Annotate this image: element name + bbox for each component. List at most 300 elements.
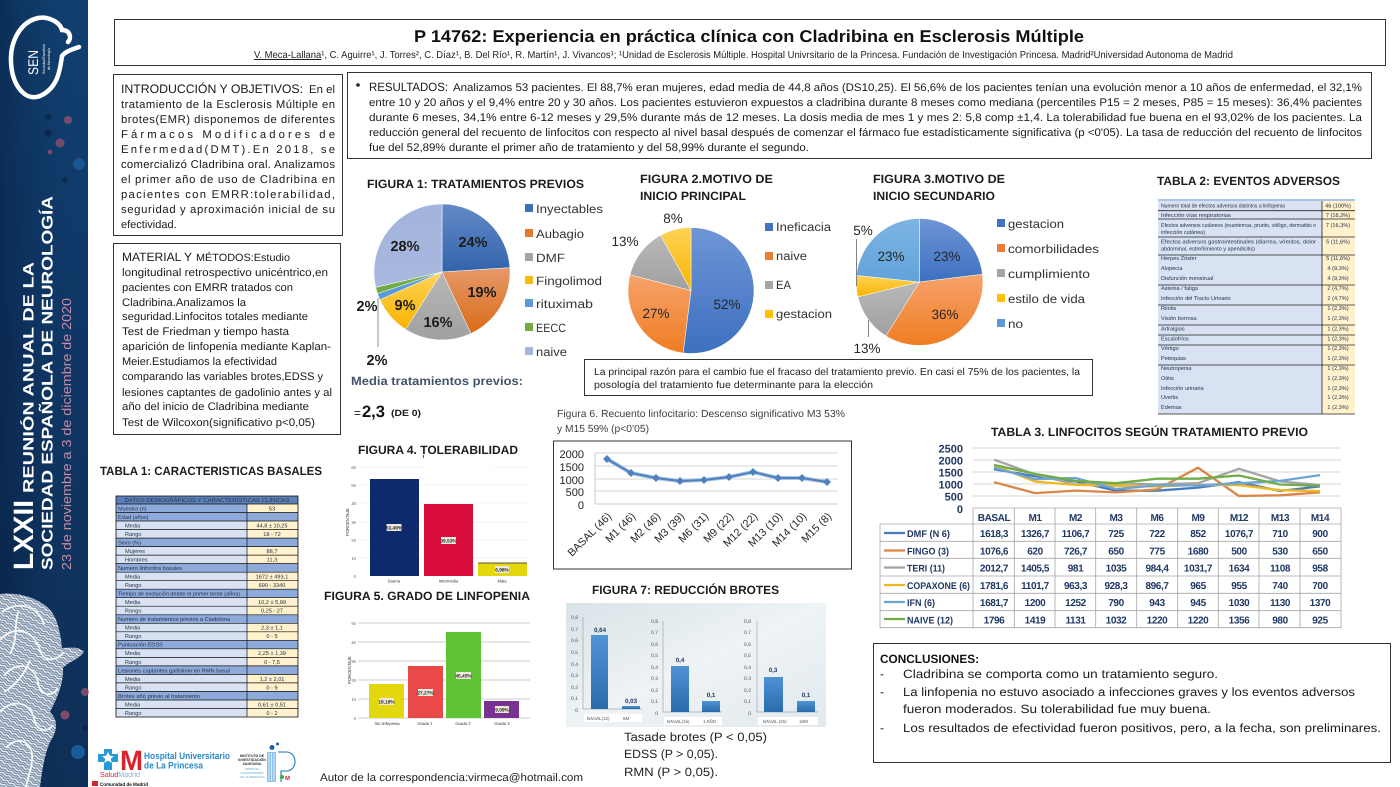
- table 2: eventos adversos: 1 (2,3%): [1327, 336, 1349, 342]
- bar chart: tolerabilidad: 0: [354, 574, 357, 579]
- bar chart: grado de linfopenia: [347, 621, 519, 726]
- table 2: eventos adversos: Infección urinaria: [1161, 385, 1204, 392]
- bar chart: brotes 18 meses: 0,6: [744, 642, 751, 648]
- row: FINGO: [884, 546, 1329, 558]
- row: IFN: 945: [1190, 598, 1207, 609]
- row: NAIVE: [884, 616, 1329, 626]
- table 1: características basales: 88,7: [267, 549, 277, 555]
- pie labels: 2%: [357, 299, 378, 315]
- x axis labels: M1 (46): [603, 511, 638, 545]
- table 2: eventos adversos: Vértigo: [1161, 345, 1179, 352]
- row: COPAXONE: COPAXONE (6): [907, 581, 970, 592]
- table 1: características basales: Media: [125, 522, 141, 529]
- table 2: eventos adversos: 1 (2,3%): [1327, 315, 1349, 322]
- bar chart: tolerabilidad: 20: [351, 538, 357, 543]
- table 1: características basales: 690 - 3340: [259, 583, 285, 589]
- callout: media tratamientos previos: 2,3: [362, 403, 385, 421]
- bar chart: tolerabilidad: 40: [351, 501, 357, 506]
- table 2: eventos adversos: [1158, 199, 1355, 414]
- table 2: eventos adversos: 4 (9,3%): [1327, 275, 1349, 282]
- bar chart: brotes 1 año: 0,8: [651, 619, 658, 625]
- bar chart: grado de linfopenia: 0: [354, 716, 357, 721]
- table 2: eventos adversos: 1 (2,3%): [1327, 365, 1349, 372]
- table 1: características basales: Rango: [125, 532, 141, 538]
- data table: linfocitos: BASAL: [978, 513, 1011, 524]
- table 2: eventos adversos: Otitis: [1161, 375, 1174, 382]
- table 1: características basales: [116, 496, 298, 717]
- row: DMF: 852: [1190, 529, 1207, 540]
- row: NAIVE: 1796: [984, 616, 1005, 626]
- panel: material y métodos: Cladribina.Analizamos la: [122, 297, 247, 309]
- bar chart: brotes 6 meses: 0,4: [571, 662, 578, 668]
- row: IFN: 943: [1149, 598, 1166, 609]
- legend: tratamientos previos: [525, 202, 603, 359]
- table 2: eventos adversos: 1 (2,3%): [1327, 394, 1349, 401]
- legend: motivo principal: Ineficacia: [776, 220, 831, 234]
- data table: linfocitos: M6: [1150, 513, 1164, 524]
- axis labels: 1500: [560, 462, 584, 474]
- bar chart: tolerabilidad: Intermedia: [439, 578, 459, 584]
- table 1: características basales: Rango: [125, 583, 141, 589]
- pie labels: 8%: [663, 211, 683, 226]
- pie labels: 24%: [458, 235, 488, 251]
- table 2: eventos adversos: 1 (2,3%): [1327, 305, 1349, 312]
- y axis labels: 0: [957, 504, 963, 516]
- table 1: características basales: Media: [125, 701, 141, 708]
- panel: resultados: Analizamos 53 pacientes. El 88,7% eran mujeres, edad media de 44,8 años (DS10,25). El 56,6% de los pacientes tenían una evolución menor a 10 años de enfermedad, el 32,1%: [453, 82, 1362, 94]
- bar chart: brotes 18 meses: 18M: [799, 719, 808, 724]
- bar chart: brotes 1 año: 0,1: [707, 692, 716, 699]
- table 1: características basales: Puntuación EDSS: [118, 642, 163, 649]
- callout: media tratamientos previos: =: [354, 406, 361, 420]
- bar chart: tolerabilidad: [345, 465, 527, 584]
- bar chart: brotes 18 meses: 0,5: [744, 653, 751, 659]
- callout: media tratamientos previos: [351, 374, 523, 421]
- table 2: eventos adversos: 1 (2,3%): [1327, 404, 1349, 411]
- bar chart: brotes 6 meses: 6M: [623, 716, 630, 721]
- bar chart: brotes 1 año: 0,6: [651, 642, 658, 648]
- panel: introducción y objetivos: En el: [309, 84, 335, 96]
- row: TERI: 984,4: [1145, 564, 1169, 574]
- x axis labels: M9 (22): [701, 511, 736, 545]
- heading: figura 1: FIGURA 1: TRATAMIENTOS PREVIOS: [367, 177, 584, 191]
- table 1: características basales: 2,25 ± 1,39: [258, 651, 286, 657]
- row: COPAXONE: 928,3: [1104, 581, 1128, 592]
- bar chart: brotes 1 año: 1 AÑO: [703, 719, 717, 724]
- table 1: características basales: 0,61 ± 0,51: [258, 702, 286, 708]
- pie chart: motivo principal: [628, 228, 754, 353]
- table 1: características basales: Lesiones captantes gadolinio en RMN basal: [118, 667, 230, 674]
- bar chart: brotes 18 meses: [744, 619, 818, 725]
- authors and affiliations: V. Meca-Lallana¹, C. Aguirre¹, J. Torres², C. Díaz¹, B. Del Río¹, R. Martín¹, J. Vivancos¹; ¹Unidad de Esclerosis Múltiple. Hospital Univrsitario de la Princesa. Fundación de Investigación Princesa. Madrid²Universidad Autonoma de Madrid: [254, 50, 1233, 61]
- row: FINGO: 1076,6: [980, 546, 1009, 558]
- pie labels: 2%: [367, 353, 388, 369]
- row: IFN: 1030: [1229, 598, 1250, 609]
- heading: figura 3: INICIO SECUNDARIO: [873, 189, 995, 203]
- sidebar title: [8, 196, 74, 570]
- bar chart: brotes 1 año: 0: [655, 711, 658, 717]
- table 1: características basales: Hombres: [125, 556, 148, 564]
- table 1: características basales: Media: [125, 676, 141, 683]
- figure 2: motivo de inicio principal: [611, 172, 832, 353]
- panel: resultados: durante 6 meses, 34,1% entre 6-12 meses y 29,5% durante más de 12 meses. La dosis media de mes 1 y mes 2: 5,8 comp ±1,4. La tolerabilidad fue buena en el 93,02% de los pacientes. La: [369, 112, 1363, 124]
- caption: figura 6: y M15 59% (p<0’05): [557, 424, 649, 435]
- panel: material y métodos: seguridad.Linfocitos totales mediante: [122, 311, 308, 323]
- callout: principal razón del cambio: La principal razón para el cambio fue el fracaso del tratamiento previo. En casi el 75% de los pacientes, la: [594, 367, 1080, 378]
- row: IFN: 1252: [1065, 598, 1087, 609]
- logo: Instituto de Investigación Sanitaria: INSTITUTO DE: [240, 754, 265, 758]
- heading: figura 2: FIGURA 2.MOTIVO DE: [640, 172, 773, 186]
- panel: introducción y objetivos: Enfermedad(DMT).En 2018, se: [121, 144, 335, 156]
- legend: tratamientos previos: EECC: [536, 321, 566, 335]
- figure 3: motivo de inicio secundario: [853, 172, 1099, 356]
- bar chart: brotes 1 año: 0,4: [676, 657, 685, 664]
- x axis labels: [566, 511, 834, 559]
- heading: figura 4: FIGURA 4. TOLERABILIDAD: [358, 443, 518, 457]
- row: TERI: 1108: [1270, 564, 1291, 574]
- panel: conclusiones: -: [880, 721, 884, 735]
- bar chart: brotes 6 meses: 0,64: [594, 627, 607, 634]
- table 1: características basales: 0,25 - 27: [261, 609, 283, 615]
- bar chart: brotes 18 meses: 0,3: [769, 667, 778, 674]
- bar chart: brotes 6 meses: 0,5: [571, 650, 578, 656]
- table 2: eventos adversos: 5 (11,6%): [1326, 238, 1350, 246]
- bar chart: tolerabilidad: 10: [351, 556, 357, 561]
- table 2: eventos adversos: 1 (2,3%): [1327, 385, 1349, 392]
- figure 5: grado de linfopenia: [324, 589, 530, 726]
- bar chart: grado de linfopenia: 45,45%: [455, 674, 472, 680]
- table 1: características basales: 18 - 72: [263, 532, 281, 538]
- icon: SEN logo: SEN: [25, 50, 41, 75]
- bar chart: grado de linfopenia: 20: [351, 678, 357, 683]
- legend: motivo secundario: [997, 217, 1099, 331]
- pie labels: 13%: [853, 341, 881, 356]
- table 2: eventos adversos: Astenia / fatiga: [1161, 285, 1199, 292]
- table 1: características basales: Media: [125, 625, 141, 632]
- row: TERI: 1405,5: [1021, 564, 1050, 574]
- table 2: eventos adversos: 1 (2,3%): [1327, 375, 1349, 382]
- pie labels: 23%: [877, 249, 905, 264]
- x axis labels: M14 (10): [770, 511, 809, 550]
- logo: Hospital Universitario de La Princesa: Hospital Universitario: [144, 751, 230, 762]
- bar chart: brotes 6 meses: 0,6: [571, 638, 578, 644]
- logo: Instituto de Investigación Sanitaria: DE LA PRINCESA: [240, 775, 264, 779]
- data table: linfocitos: M14: [1311, 513, 1330, 524]
- row: TERI: 958: [1312, 564, 1329, 574]
- pie labels: [357, 235, 497, 369]
- x axis labels: M2 (46): [628, 511, 663, 545]
- row: COPAXONE: 896,7: [1145, 581, 1169, 592]
- table 2: eventos adversos: Uveítis: [1161, 394, 1178, 401]
- logo: Instituto de Investigación Sanitaria: INVESTIGACIÓN: [238, 757, 266, 762]
- panel: material y métodos: MÉTODOS:Estudio: [196, 251, 290, 264]
- legend: motivo principal: naive: [776, 249, 807, 263]
- table 1: características basales: DATOS DEMOGRÁFICOS Y CARACTERÍSTICAS CLÍNICAS: [124, 497, 290, 504]
- panel: material y métodos: comparando las variables brotes,EDSS y: [122, 371, 323, 383]
- table 2: eventos adversos: 5 (11,6%): [1326, 255, 1350, 262]
- y axis labels: 2000: [939, 456, 963, 468]
- row: IFN: 1130: [1270, 598, 1291, 609]
- logo: Instituto de Investigación Sanitaria: UNIVERSITARIO: [240, 771, 264, 775]
- row: FINGO: 530: [1272, 546, 1289, 558]
- panel: conclusiones: La linfopenia no estuvo asociado a infecciones graves y los eventos adversos: [903, 685, 1355, 699]
- line chart: recuento linfocitario: [603, 455, 831, 486]
- bar chart: grado de linfopenia: 9,09%: [495, 708, 510, 714]
- table 1: características basales: Muestra (n): [118, 505, 147, 512]
- table 2: eventos adversos: Disfunción menstrual: [1161, 275, 1213, 282]
- bar chart: tolerabilidad: 30: [351, 520, 357, 525]
- panel: introducción y objetivos: pacientes con EMRR:tolerabilidad,: [121, 189, 335, 201]
- callout: media tratamientos previos: Media tratamientos previos:: [351, 374, 523, 388]
- figure 1: tratamientos previos: [351, 177, 603, 421]
- panel: conclusiones: Los resultados de efectividad fueron positivos, pero, a la fecha, son preliminares.: [903, 721, 1381, 735]
- bar chart: grado de linfopenia: 27,27%: [417, 690, 434, 696]
- table 2: eventos adversos: 2 (4,7%): [1327, 295, 1349, 302]
- pie labels: 13%: [611, 234, 639, 249]
- table 2: eventos adversos: Petequias: [1161, 355, 1186, 362]
- row: IFN: [884, 598, 1331, 609]
- row: TERI: [884, 564, 1329, 574]
- table 2: eventos adversos: 1 (2,3%): [1327, 355, 1349, 362]
- table 2: eventos adversos: Visión borrosa: [1161, 315, 1198, 322]
- heading: figura 2: [640, 172, 773, 203]
- table 2: eventos adversos: Herpes Zóster: [1161, 255, 1197, 262]
- row: DMF: 722: [1149, 529, 1166, 540]
- bar chart: brotes 6 meses: 0,3: [571, 673, 578, 679]
- row: COPAXONE: 965: [1190, 581, 1207, 592]
- table 1: características basales: Mujeres: [125, 548, 145, 555]
- row: DMF: 1618,3: [980, 529, 1009, 540]
- row: NAIVE: 980: [1272, 616, 1289, 626]
- bar chart: brotes 18 meses: 0,4: [744, 665, 751, 671]
- row: COPAXONE: 963,3: [1064, 581, 1088, 592]
- figure 7: reducción brotes: [566, 583, 826, 779]
- pie labels: 36%: [931, 307, 959, 322]
- panel: resultados: RESULTADOS:: [369, 80, 448, 94]
- row: FINGO: 1680: [1188, 546, 1209, 558]
- row: NAIVE: 1220: [1188, 616, 1209, 626]
- pie labels: 16%: [423, 315, 453, 331]
- legend: motivo secundario: cumplimiento: [1008, 267, 1090, 281]
- table 2: eventos adversos: 4 (9,3%): [1327, 265, 1349, 272]
- row: TERI: 1035: [1106, 564, 1127, 574]
- x axis labels: BASAL (46): [566, 511, 614, 559]
- data table: linfocitos: M12: [1230, 513, 1249, 524]
- bar chart: brotes 1 año: 0,5: [651, 653, 658, 659]
- heading: figura 3: FIGURA 3.MOTIVO DE: [873, 172, 1005, 186]
- bar chart: brotes 6 meses: 0: [575, 708, 578, 714]
- table 2: eventos adversos: Rinitis: [1161, 305, 1176, 312]
- data table: linfocitos: M2: [1069, 513, 1083, 524]
- panel: material y métodos: año del inicio de Cladribina mediante: [122, 401, 309, 413]
- text: autor de correspondencia: Autor de la correspondencia:virmeca@hotmail.com: [320, 772, 583, 784]
- row: TERI: 2012,7: [980, 564, 1009, 574]
- caption: figura 6: Figura 6. Recuento linfocitario: Descenso significativo M3 53%: [557, 409, 845, 420]
- table 1: características basales: Rango: [125, 660, 141, 666]
- bar chart: tolerabilidad: PORCENTAJE: [345, 508, 350, 536]
- x axis labels: M15 (8): [799, 511, 834, 545]
- row: NAIVE: 925: [1312, 616, 1329, 626]
- pie labels: 9%: [395, 298, 416, 314]
- table 2: eventos adversos: Infección vías respiratorias: [1161, 212, 1231, 219]
- panel: introducción y objetivos: seguridad y aproximación inicial de su: [121, 204, 335, 216]
- panel: resultados: fue del 52,89% durante el primer año de tratamiento y del 58,99% durante el segundo.: [369, 142, 809, 154]
- bar chart: tolerabilidad: 60: [351, 465, 357, 470]
- y axis labels: 500: [945, 492, 963, 504]
- table 2: eventos adversos: 1 (2,3%): [1327, 326, 1349, 332]
- table 1: características basales: Edad (años): [118, 514, 149, 521]
- axis labels: 0: [578, 500, 584, 512]
- panel: material y métodos: Meier.Estudiamos la efectividad: [122, 356, 277, 368]
- row: FINGO: 775: [1149, 546, 1166, 558]
- logo: Instituto de Investigación Sanitaria: [238, 742, 295, 782]
- bar chart: grado de linfopenia: Grado 1: [417, 721, 433, 726]
- callout: principal razón del cambio: [584, 360, 1092, 396]
- bar chart: tolerabilidad: 53,49%: [386, 526, 403, 532]
- bar chart: grado de linfopenia: 18,18%: [378, 700, 395, 706]
- table 1: características basales: 0 - 2: [266, 711, 278, 717]
- panel: introducción y objetivos: tratamiento de la Esclerosis Múltiple en: [121, 99, 335, 111]
- y axis labels: 1500: [939, 468, 963, 480]
- bar chart: brotes 1 año: 0,3: [651, 676, 658, 682]
- legend: motivo principal: EA: [776, 278, 791, 292]
- legend: tratamientos previos: Aubagio: [536, 227, 584, 241]
- panel: introducción y objetivos: efectividad.: [121, 219, 177, 231]
- bar chart: brotes 6 meses: 0,2: [571, 685, 578, 691]
- legend: motivo secundario: estilo de vida: [1008, 292, 1085, 306]
- panel: conclusiones: -: [880, 685, 884, 699]
- table 1: características basales: Rango: [125, 634, 141, 640]
- panel: conclusiones: CONCLUSIONES:: [880, 652, 979, 666]
- panel: resultados: entre 10 y 20 años y el 9,4% entre 20 y 30 años. Los pacientes estuvieron expuestos a cladribina durante 8 meses como mediana (percentiles P15 = 2 meses, P85 = 15 meses): 36,4% pacientes: [369, 97, 1363, 109]
- bar chart: brotes 6 meses: 0,7: [571, 627, 578, 633]
- bar chart: tolerabilidad: 39,53%: [440, 538, 457, 544]
- bar chart: grado de linfopenia: 10: [351, 697, 357, 702]
- y axis labels: [939, 444, 963, 516]
- row: FINGO: 650: [1108, 546, 1125, 558]
- legend: motivo principal: gestacion: [776, 307, 832, 321]
- pie labels: 23%: [933, 249, 961, 264]
- line chart: linfocitos por tratamiento: [994, 460, 1320, 496]
- data table: linfocitos: M9: [1191, 513, 1205, 524]
- bar chart: brotes 18 meses: 0: [748, 711, 751, 717]
- table 2: eventos adversos: Numero total de efectos adversos distintos a linfopenia: [1161, 202, 1286, 210]
- logo: Hospital Universitario de La Princesa: M: [120, 745, 143, 776]
- axis labels: [560, 449, 584, 512]
- panel: material y métodos: pacientes con EMRR tratados con: [122, 282, 293, 294]
- table 1: características basales: 11,3: [267, 558, 277, 564]
- panel: resultados: [348, 72, 1372, 158]
- callout: principal razón del cambio: posología del tratamiento fue determinante para la elección: [594, 380, 873, 391]
- bar chart: brotes 6 meses: 0,8: [571, 615, 578, 621]
- legend: tratamientos previos: Inyectables: [536, 202, 603, 216]
- table 2: eventos adversos: abdominal, estreñimiento y apendicitis): [1161, 246, 1255, 252]
- table 2: eventos adversos: 46 (100%): [1325, 202, 1351, 210]
- bar chart: brotes 6 meses: 0,03: [625, 698, 638, 705]
- sidebar title: REUNIÓN ANUAL DE LA: [20, 262, 38, 493]
- pie labels: [611, 211, 741, 321]
- legend: tratamientos previos: DMF: [536, 251, 565, 265]
- axis labels: 1000: [560, 475, 584, 487]
- data table: linfocitos: [880, 508, 1341, 628]
- table 2: eventos adversos: Infección del Tracto Urinario: [1161, 295, 1231, 302]
- data table: linfocitos: M1: [1028, 513, 1042, 524]
- table 1: características basales: 1,2 ± 2,01: [260, 677, 284, 683]
- panel: introducción y objetivos: Fármacos Modificadores de: [121, 129, 335, 141]
- sidebar title: SOCIEDAD ESPAÑOLA DE NEUROLOGÍA: [38, 196, 56, 570]
- row: COPAXONE: 1101,7: [1021, 581, 1050, 592]
- row: TERI: 1634: [1229, 564, 1250, 574]
- bar chart: brotes 6 meses: [571, 615, 642, 722]
- pie labels: 19%: [467, 285, 497, 301]
- row: IFN: 790: [1108, 598, 1125, 609]
- bar chart: brotes 1 año: 0,7: [651, 630, 658, 636]
- bar chart: grado de linfopenia: 50: [351, 621, 357, 626]
- pie chart: tratamientos previos: [374, 204, 510, 340]
- icon: SEN logo: Sociedad Española: [42, 44, 46, 74]
- heading: figura 7: FIGURA 7: REDUCCIÓN BROTES: [592, 583, 779, 597]
- row: FINGO: 620: [1027, 546, 1044, 558]
- table 2: eventos adversos: Artralgias: [1161, 326, 1185, 332]
- panel: conclusiones: -: [880, 667, 884, 681]
- row: COPAXONE: 955: [1231, 581, 1248, 592]
- row: IFN: IFN (6): [907, 598, 935, 609]
- row: COPAXONE: 1781,6: [980, 581, 1009, 592]
- sidebar: congress banner: [0, 0, 89, 787]
- logo: Hospital Universitario de La Princesa: SaludMadrid: [100, 770, 140, 779]
- callout: media tratamientos previos: (DE 0): [391, 408, 421, 418]
- table 2: eventos adversos: Escalofríos: [1161, 336, 1189, 342]
- axis labels: 2000: [560, 449, 584, 461]
- bar chart: tolerabilidad: 50: [351, 483, 357, 488]
- bar chart: brotes 6 meses: 0,1: [571, 696, 578, 702]
- table 1: características basales: 44,8 ± 10,25: [256, 523, 288, 529]
- title block: [114, 20, 1386, 66]
- bar chart: brotes 1 año: 0,4: [651, 665, 658, 671]
- text: resultados de efectividad: EDSS (P > 0,05).: [624, 747, 718, 761]
- row: IFN: 1681,7: [980, 598, 1009, 609]
- pie labels: 27%: [642, 306, 670, 321]
- row: TERI: 981: [1068, 564, 1084, 574]
- bar chart: brotes 1 año: 0,2: [651, 688, 658, 694]
- logo: Instituto de Investigación Sanitaria: HOSPITAL: [245, 767, 260, 771]
- x axis labels: M13 (10): [746, 511, 785, 550]
- table 2: eventos adversos: 1 (2,3%): [1327, 345, 1349, 352]
- table 1: características basales: Sexo (%): [118, 540, 141, 546]
- bar chart: grado de linfopenia: 40: [351, 640, 357, 645]
- bar chart: brotes 18 meses: 0,7: [744, 630, 751, 636]
- bar chart: grado de linfopenia: Grado 2: [455, 721, 471, 726]
- table 1: características basales: 53: [269, 506, 275, 512]
- pie labels: 5%: [853, 223, 873, 238]
- row: NAIVE: 1419: [1025, 616, 1046, 626]
- panel: material y métodos: longitudinal retrospectivo unicéntrico,en: [122, 267, 328, 279]
- data table: linfocitos: M13: [1271, 513, 1290, 524]
- logo: Hospital Universitario de La Princesa: de La Princesa: [144, 760, 204, 772]
- panel: material y métodos: aparición de linfopenia mediante Kaplan-: [122, 341, 331, 353]
- bar chart: grado de linfopenia: Grado 3: [494, 721, 510, 726]
- table 1: características basales: Brotes año previo al tratamiento: [118, 693, 200, 700]
- x axis labels: M12 (22): [721, 511, 760, 550]
- table 1: características basales: 0 - 9: [266, 685, 278, 691]
- table 1: características basales: 0 - 7,5: [264, 660, 280, 666]
- legend: motivo principal: [765, 220, 832, 321]
- bar chart: brotes 18 meses: 0,1: [802, 692, 811, 699]
- row: COPAXONE: 740: [1272, 581, 1289, 592]
- row: DMF: DMF (N 6): [907, 529, 950, 540]
- data table: linfocitos: M3: [1109, 513, 1123, 524]
- row: FINGO: 500: [1231, 546, 1248, 558]
